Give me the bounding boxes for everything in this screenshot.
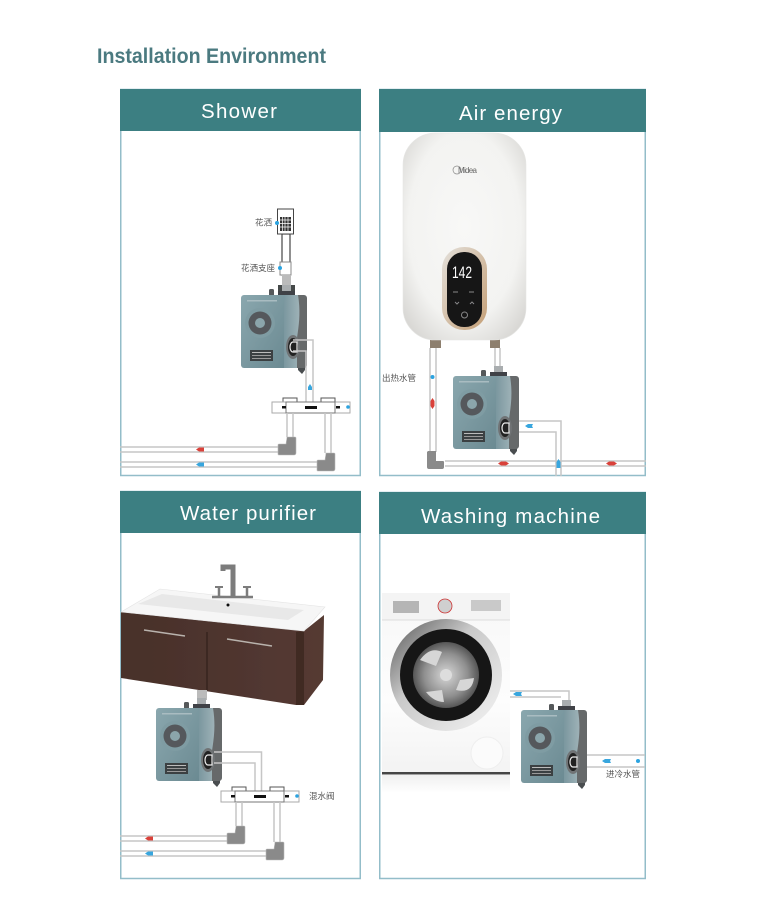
header: water purifier: Water purifier	[180, 502, 316, 525]
pipes: washing machine	[510, 691, 645, 767]
plumbing: purifier mixer valve	[120, 786, 300, 860]
header: washing machine	[379, 492, 646, 534]
label: shower bracket: 花洒支座	[241, 263, 276, 273]
panel: air energy	[379, 89, 646, 476]
pump: shower	[241, 285, 307, 374]
control panel	[442, 247, 487, 330]
pump: washing machine	[521, 700, 587, 789]
panel: shower	[120, 88, 361, 476]
washing machine	[382, 593, 510, 793]
sink cabinet	[121, 567, 325, 705]
label: hot water outlet pipe: 出热水管	[382, 373, 416, 383]
pipes: pump to mixer	[214, 752, 262, 791]
logo: Midea	[458, 166, 478, 175]
icon: shower head	[275, 209, 295, 291]
label: cold water inlet pipe: 进冷水管	[606, 769, 640, 779]
pump: air energy	[453, 366, 519, 455]
pipes: pump to mixer	[293, 340, 313, 402]
header: air energy: Air energy	[459, 102, 563, 125]
header: air energy	[379, 89, 646, 132]
header: shower: Shower	[201, 100, 277, 123]
plumbing: shower mixer valve	[120, 398, 350, 472]
water heater	[403, 133, 526, 348]
title: Installation Environment	[97, 45, 326, 68]
panel: washing machine	[379, 492, 646, 878]
control panel: 142	[452, 263, 472, 282]
header: shower	[120, 89, 361, 131]
pipes: air energy	[427, 348, 646, 476]
faucet	[212, 567, 253, 606]
header: washing machine: Washing machine	[421, 505, 600, 528]
pump: water purifier	[156, 690, 222, 787]
header: water purifier	[120, 491, 361, 533]
label: mixing valve: 混水阀	[309, 791, 335, 801]
panel: water purifier	[120, 490, 361, 880]
label: shower head: 花洒	[255, 218, 273, 228]
